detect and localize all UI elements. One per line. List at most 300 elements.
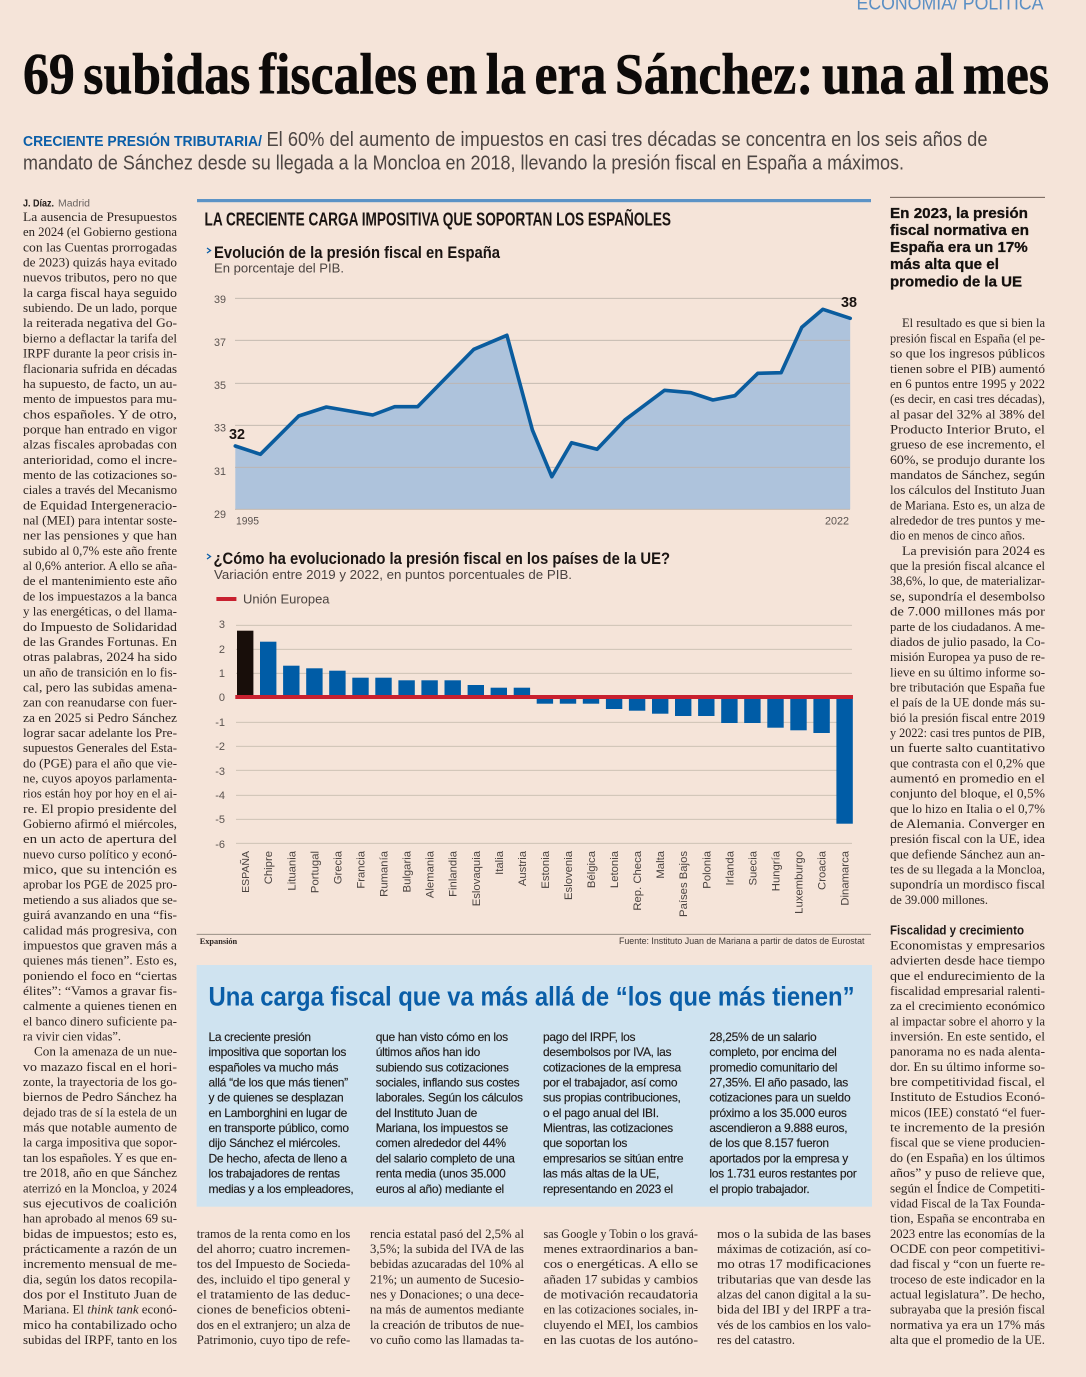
box text column 4: próximo a los 35.000 euros	[709, 1106, 847, 1120]
text block: bottom column 1: tramos de la renta como en los	[197, 1227, 350, 1241]
box text column 1: dijo Sánchez el miércoles.	[208, 1136, 340, 1150]
box text column 3: empresarios se sitúan entre	[543, 1151, 684, 1165]
text block: bottom column 1	[197, 1227, 351, 1347]
country labels: Bélgica	[586, 850, 598, 888]
text block: left column: aprobar los PGE de 2025 pro-	[23, 878, 177, 892]
text block: left column: chos españoles. Y de otro,	[23, 407, 177, 421]
heading: line chart: Evolución de la presión fiscal en España	[214, 244, 501, 262]
axis labels: 35	[214, 380, 226, 392]
text block: bottom column 2: bebidas azucaradas del 10% al	[370, 1257, 524, 1271]
text block: left column: porque han entrado en vigor	[23, 422, 178, 436]
text block: bottom column 2: rencia estatal pasó del 2,5% al	[370, 1227, 524, 1241]
text block: right column lower: panorama no es nada alenta-	[890, 1045, 1045, 1059]
box text column 2: laborales. Según los cálculos	[376, 1091, 523, 1105]
box text column 3: las más altas de la UE,	[543, 1167, 659, 1181]
box text column 4: completo, por encima del	[709, 1045, 837, 1059]
subtitle block: mandato de Sánchez desde su llegada a la Moncloa en 2018, llevando la presión fiscal en España a máximos.	[23, 152, 904, 174]
text block: bottom column 3: menes extraordinarios a ban-	[544, 1242, 698, 1256]
text block: left column: nuevo curso político y econó-	[23, 847, 177, 861]
text block: right column lower: dad fiscal y “con un fuerte re-	[890, 1257, 1045, 1271]
text block: left column: incremento mensual de me-	[23, 1257, 177, 1271]
country labels: Estonia	[540, 850, 552, 889]
axis labels: -4	[215, 790, 225, 802]
text block: right column: parte de los ciudadanos. A me-	[890, 620, 1045, 634]
country labels: Suecia	[747, 850, 759, 886]
chart panel heading: LA CRECIENTE CARGA IMPOSITIVA QUE SOPORTAN LOS ESPAÑOLES	[204, 208, 671, 230]
box text column 4: 28,25% de un salario	[709, 1030, 817, 1044]
text block: right column: Producto Interior Bruto, el	[890, 422, 1046, 436]
text block: left column: re. El propio presidente del	[23, 802, 178, 816]
box text column 4: ascendieron a 9.888 euros,	[709, 1121, 847, 1135]
text block: bottom column 3	[544, 1227, 698, 1347]
box text column 4: promedio comunitario del	[709, 1060, 837, 1074]
box text column 1: impositiva que soportan los	[208, 1045, 346, 1059]
text block: bottom column 1: Patrimonio, cuyo tipo de refe-	[197, 1333, 350, 1347]
bars	[237, 631, 853, 824]
text block: left column: flacionaria sufrida en décadas	[23, 362, 177, 376]
box text column 2: que han visto cómo en los	[376, 1030, 508, 1044]
box text column 4: aportados por la empresa y	[709, 1151, 848, 1165]
text block: left column: Con la amenaza de un nue-	[34, 1045, 177, 1059]
text block: left column: bierno a deflactar la tarifa del	[23, 331, 178, 345]
axis labels: -1	[215, 717, 225, 729]
text block: left column: do Impuesto de Solidaridad	[23, 620, 178, 634]
text block: right column lower: inversión. En este sentido, el	[890, 1030, 1046, 1044]
box text column 3: o el pago anual del IBI.	[543, 1106, 659, 1120]
text block: left column: de las Grandes Fortunas. En	[23, 635, 178, 649]
text block: right column: 60%, se produjo durante los	[890, 453, 1045, 467]
text block: bottom column 2: la creación de tributos de nue-	[370, 1318, 524, 1332]
box text column 2: comen alrededor del 44%	[376, 1136, 506, 1150]
text block: right column: un fuerte salto cuantitativo	[890, 741, 1045, 755]
text block: left column: supuestos Generales del Esta-	[23, 741, 177, 755]
callout: right column highlight: En 2023, la presión	[890, 205, 1028, 222]
text block: left column: Mariana. El think tank econó-	[23, 1303, 177, 1317]
text block: left column: tre 2018, año en que Sánchez	[23, 1166, 177, 1180]
text block: left column: ner las pensiones y que han	[23, 529, 178, 543]
box text column 1: y de quienes se desplazan	[208, 1091, 343, 1105]
text block: bottom column 4: vés de los cambios en los valo-	[717, 1318, 871, 1332]
text block: right column: de Mariana. Esto es, un alza de	[890, 498, 1045, 512]
country labels: Letonia	[609, 850, 621, 888]
text block: left column: la reiterada negativa del Go-	[23, 316, 177, 330]
text block: left column: ha supuesto, de facto, un au-	[23, 377, 177, 391]
box text column 1: españoles va mucho más	[208, 1060, 338, 1074]
text block: left column: aterrizó en la Moncloa, y 2024	[23, 1181, 178, 1195]
text block: left column: con las Cuentas prorrogadas	[23, 240, 177, 254]
text block: right column lower: subrayaba que la presión fiscal	[890, 1303, 1045, 1317]
text block: left column: do (PGE) para el año que vie-	[23, 756, 177, 770]
text block: right column lower: micos (IEE) constató “el fuer-	[890, 1105, 1045, 1119]
text block: right column: (es decir, en casi tres décadas),	[890, 392, 1045, 406]
box text column 4: el propio trabajador.	[709, 1182, 809, 1196]
text block: left column: poniendo el foco en “ciertas	[23, 969, 177, 983]
callout: right column highlight	[890, 205, 1029, 291]
box text column 3: pago del IRPF, los	[543, 1030, 635, 1044]
box text column 1: medias y a los empleadores,	[208, 1182, 353, 1196]
country labels: Grecia	[332, 850, 344, 884]
heading: line chart	[207, 244, 501, 276]
text block: right column: tienen sobre el PIB) aumentó	[890, 362, 1045, 376]
box text column 1: allá “de los que más tienen”	[208, 1076, 348, 1090]
axis labels: 29	[214, 509, 226, 521]
text block: right column lower: Instituto de Estudios Econó-	[890, 1090, 1045, 1104]
callout: right column highlight: más alta que el	[890, 256, 999, 273]
country labels: Países Bajos	[678, 851, 690, 917]
text block: right column: alrededor de tres puntos y me-	[890, 514, 1045, 528]
text block: left column: mento de impuestos para mu-	[23, 392, 177, 406]
text block: right column: que contrasta con el 0,2% que	[890, 756, 1045, 770]
text block: left column: otras palabras, 2024 ha sido	[23, 650, 177, 664]
text block: right column: bió la presión fiscal entre 2019	[890, 711, 1045, 725]
text block: left column: prácticamente a razón de un	[23, 1242, 178, 1256]
text block: left column: za en 2025 si Pedro Sánchez	[23, 711, 177, 725]
box text column 3: cotizaciones de la empresa	[543, 1060, 681, 1074]
text block: right column: so que los ingresos públicos	[890, 347, 1045, 361]
country labels: Hungría	[770, 850, 782, 891]
axis labels: 3	[219, 619, 225, 631]
text block: left column: subiendo. De un lado, porque	[23, 301, 177, 315]
axis labels	[214, 294, 849, 528]
text block: right column: los cálculos del Instituto Juan	[890, 483, 1046, 497]
text block: right column: bre tributación que España fue	[890, 680, 1045, 694]
axis labels: -2	[215, 741, 225, 753]
box text column 1: en transporte público, como	[208, 1121, 349, 1135]
axis labels	[215, 619, 225, 851]
text block: left column: vo mazazo fiscal en el hori-	[23, 1060, 177, 1074]
country labels: Malta	[655, 850, 667, 879]
text block: left column: sus ejecutivos de coalición	[23, 1196, 178, 1210]
text block: right column: presión fiscal con la UE, idea	[890, 832, 1045, 846]
country labels: Dinamarca	[840, 850, 852, 906]
text block: right column lower: normativa ya era un 17% más	[890, 1318, 1045, 1332]
axis labels: 39	[214, 294, 226, 306]
text block: left column: mico ha contabilizado ocho	[23, 1318, 177, 1332]
country labels: Polonia	[701, 850, 713, 889]
axis labels: -6	[215, 839, 225, 851]
box text column 2	[376, 1030, 523, 1196]
text block: left column: más que notable aumento de	[23, 1121, 177, 1135]
text block: left column: nuevos tributos, pero no que	[23, 271, 177, 285]
axis labels: 2	[219, 644, 225, 656]
box text column 2: euros al año) mediante el	[376, 1182, 504, 1196]
text block: left column: Gobierno afirmó el miércoles,	[23, 817, 177, 831]
text block: right column lower: al impactar sobre el ahorro y la	[890, 1014, 1045, 1028]
text block: left column: ciales a través del Mecanismo	[23, 483, 177, 497]
text block: right column: tes de su llegada a la Moncloa,	[890, 863, 1045, 877]
text block: bottom column 3: sas Google y Tobin o los gravá-	[544, 1227, 698, 1241]
text block: bottom column 2: na más de aumentos mediante	[370, 1303, 524, 1317]
text block: left column: de el mantenimiento este año	[23, 574, 177, 588]
box text column 2: del Instituto Juan de	[376, 1106, 478, 1120]
data line	[235, 309, 850, 477]
text block: bottom column 3: cos o energéticas. A ello se	[544, 1257, 698, 1271]
text block: left column: cal, pero las subidas amena-	[23, 680, 177, 694]
text block: right column lower: do (en España) en los últimos	[890, 1151, 1045, 1165]
byline	[23, 198, 90, 210]
text block: left column: zonte, la trayectoria de los go-	[23, 1075, 177, 1089]
text block: right column: 38,6%, lo que, de materializar-	[890, 574, 1045, 588]
text block: right column: conjunto del bloque, el 0,5%	[890, 787, 1046, 801]
text block: left column: la carga impositiva que sopor-	[23, 1136, 177, 1150]
box text column 1: los trabajadores de rentas	[208, 1167, 340, 1181]
text block: bottom column 4: máximas de cotización, así co-	[717, 1242, 871, 1256]
text block: left column: guirá avanzando en una “fis-	[23, 908, 177, 922]
text block: left column: calidad más progresiva, con	[23, 923, 178, 937]
text block: right column: dio en menos de cinco años.	[890, 529, 1025, 543]
axis labels: 0	[219, 692, 225, 704]
country labels: Finlandia	[448, 850, 460, 897]
text block: left column: de Equidad Intergeneracio-	[23, 498, 177, 512]
text block: left column: zan con reanudarse con fuer-	[23, 696, 177, 710]
byline: Madrid	[58, 198, 90, 210]
text block: right column lower: alta que el promedio de la UE.	[890, 1333, 1045, 1347]
country labels: Bulgaria	[402, 850, 414, 892]
text block: left column: IRPF durante la peor crisis in-	[23, 347, 177, 361]
text block: left column: al 0,6% anterior. A ello se aña-	[23, 559, 177, 573]
area under line	[235, 309, 850, 509]
line chart: fiscal pressure in Spain	[214, 294, 857, 528]
subtitle block: CRECIENTE PRESIÓN TRIBUTARIA/	[23, 132, 262, 150]
axis labels: -5	[215, 814, 225, 826]
text block: right column: misión Europea ya puso de re-	[890, 650, 1045, 664]
country labels: ESPAÑA	[239, 851, 252, 893]
axis labels: 31	[214, 466, 226, 478]
text block: bottom column 4: alzas del canon digital a la su-	[717, 1288, 871, 1302]
text block: bottom column 3: cluyendo el MEI, los cambios	[544, 1318, 698, 1332]
text block: right column: El resultado es que si bien la	[902, 316, 1045, 330]
subheading: Fiscalidad y crecimiento: Fiscalidad y crecimiento	[890, 923, 1024, 937]
box text column 4: los 1.731 euros restantes por	[709, 1167, 857, 1181]
text block: bottom column 4: mos o la subida de las bases	[717, 1227, 871, 1241]
text block: bottom column 3: añaden 17 subidas y cambios	[544, 1272, 698, 1286]
text block: left column: subidas del IRPF, tanto en los	[23, 1333, 177, 1347]
text block: right column: aumentó en promedio en el	[890, 772, 1046, 786]
text block: right column lower	[890, 938, 1046, 1347]
text block: bottom column 4: res del catastro.	[717, 1333, 795, 1347]
text block: left column: de los impuestazos a la banca	[23, 589, 177, 603]
text block: right column: que lo hizo en Italia o el 0,7%	[890, 802, 1046, 816]
text block: right column: grueso de ese incremento, el	[890, 438, 1046, 452]
country labels	[239, 850, 852, 917]
text block: bottom column 4: bida del IBI y del IRPF a tra-	[717, 1303, 871, 1317]
text block: left column: subido al 0,7% este año frente	[23, 544, 177, 558]
bar chart: EU countries	[215, 619, 853, 917]
box text column 3	[543, 1030, 684, 1196]
text block: left column: en 2024 (el Gobierno gestiona	[23, 225, 177, 239]
box text column 3: representando en 2023 el	[543, 1182, 673, 1196]
heading: bar chart: Variación entre 2019 y 2022, en puntos porcentuales de PIB.	[214, 568, 572, 582]
text block: bottom column 1: el tratamiento de las deduc-	[197, 1288, 350, 1302]
box text column 3: Mientras, las cotizaciones	[543, 1121, 673, 1135]
text block: right column	[890, 316, 1046, 907]
country labels: Francia	[356, 850, 368, 889]
box text column 2: subiendo sus cotizaciones	[376, 1060, 509, 1074]
text block: left column: ne, cuyos apoyos parlamenta-	[23, 772, 177, 786]
country labels: Alemania	[425, 850, 437, 898]
text block: right column: lieve en su último informe so-	[890, 665, 1045, 679]
axis labels: -3	[215, 766, 225, 778]
text block: right column: diados de julio pasado, la Co-	[890, 635, 1045, 649]
country labels: Austria	[517, 850, 529, 886]
country labels: Lituania	[286, 850, 298, 891]
panel: chart header bar	[197, 199, 871, 202]
axis labels: 2022	[825, 516, 849, 528]
source note: Fuente: Instituto Juan de Mariana a partir de datos de Eurostat	[619, 936, 865, 946]
box text column 1: La creciente presión	[208, 1030, 311, 1044]
text block: right column: al pasar del 32% al 38% del	[890, 407, 1046, 421]
text block: bottom column 2: nes y Donaciones; o una dece-	[370, 1288, 524, 1302]
text block: right column lower: bre competitividad fiscal, el	[890, 1075, 1046, 1089]
text block: left column: el banco dinero suficiente pa-	[23, 1014, 177, 1028]
country labels: Eslovenia	[563, 850, 575, 900]
box text column 1	[208, 1030, 353, 1196]
text block: right column lower: según el Índice de Competiti-	[890, 1181, 1045, 1195]
box text column 2: sociales, inflando sus costes	[376, 1076, 520, 1090]
text block: right column lower: troceso de este indicador en la	[890, 1272, 1045, 1286]
value labels: 32	[229, 426, 245, 443]
country labels: Rumanía	[378, 850, 390, 897]
text block: left column: un año de transición en lo fis-	[23, 665, 177, 679]
box text column 2: últimos años han ido	[376, 1045, 481, 1059]
text block: left column	[23, 210, 178, 1347]
box text column 3: desembolsos por IVA, las	[543, 1045, 672, 1059]
text block: right column lower: Economistas y empresarios	[890, 938, 1045, 952]
text block: left column: han aprobado al menos 69 su-	[23, 1212, 177, 1226]
text block: bottom column 4: mo otras 17 modificaciones	[717, 1257, 871, 1271]
text block: left column: la carga fiscal haya seguido	[23, 286, 177, 300]
country labels: Italia	[494, 850, 506, 875]
text block: left column: mico, que su intención es	[23, 863, 177, 877]
text block: right column: que defiende Sánchez aun an-	[890, 847, 1045, 861]
heading: bar chart	[207, 550, 670, 582]
callout: right column highlight: fiscal normativa en	[890, 222, 1029, 239]
text block: right column: La previsión para 2024 es	[902, 544, 1045, 558]
axis labels: 33	[214, 423, 226, 435]
text block: left column: nal (MEI) para intentar soste-	[23, 514, 177, 528]
text block: bottom column 3: de motivación recaudatoria	[544, 1288, 698, 1302]
text block: right column: presión fiscal en España (el pe-	[890, 331, 1045, 345]
text block: bottom column 2: 21%; un aumento de Sucesio-	[370, 1272, 524, 1286]
text block: left column: tan los españoles. Y es que en-	[23, 1151, 177, 1165]
country labels: Croacia	[817, 850, 829, 890]
country labels: Eslovaquia	[471, 850, 483, 906]
axis labels: 1	[219, 668, 225, 680]
text block: right column: el país de la UE donde más su-	[890, 696, 1045, 710]
country labels: Rep. Checa	[632, 850, 644, 911]
subtitle block: El 60% del aumento de impuestos en casi tres décadas se concentra en los seis años de	[266, 129, 988, 151]
text block: right column lower: que el endurecimiento de la	[890, 969, 1045, 983]
text block: right column lower: actual legislatura”. De hecho,	[890, 1288, 1045, 1302]
text block: right column lower: fiscalidad empresarial ralenti-	[890, 984, 1045, 998]
credit: Expansión: Expansión	[200, 936, 237, 946]
callout: right column highlight: España era un 17%	[890, 239, 1028, 256]
box heading: Una carga fiscal que va más allá de “los que más tienen”	[208, 982, 854, 1012]
box text column 3: por el trabajador, así como	[543, 1076, 678, 1090]
text block: bottom column 2	[370, 1227, 524, 1347]
text block: left column: quienes más tienen”. Esto es,	[23, 954, 177, 968]
box text column 2: del salario completo de una	[376, 1151, 515, 1165]
text block: left column: ra vivir cien vidas”.	[23, 1030, 121, 1044]
EU reference line	[235, 695, 853, 699]
text block: bottom column 1: des, incluido el tipo general y	[197, 1272, 351, 1286]
text block: left column: de 2023) quizás haya evitado	[23, 256, 177, 270]
box text column 2: Mariana, los impuestos se	[376, 1121, 508, 1135]
subtitle block	[23, 129, 988, 174]
text block: bottom column 3: en las cuotas de los autóno-	[544, 1333, 698, 1347]
text block: bottom column 1: dos en el extranjero; un alza de	[197, 1318, 351, 1332]
box text column 2: renta media (unos 35.000	[376, 1167, 506, 1181]
text block: bottom column 2: vo cuño como las llamadas ta-	[370, 1333, 524, 1347]
text block: right column: de Alemania. Converger en	[890, 817, 1046, 831]
legend: Unión Europea	[243, 592, 330, 606]
box text column 1: en Lamborghini en lugar de	[208, 1106, 348, 1120]
text block: bottom column 2: 3,5%; la subida del IVA de las	[370, 1242, 524, 1256]
text block: left column: en un acto de apertura del	[23, 832, 178, 846]
text block: right column lower: fiscal que se viene producien-	[890, 1136, 1045, 1150]
text block: left column: lograr sacar adelante los Pre-	[23, 726, 177, 740]
value labels	[229, 294, 857, 443]
text block: right column lower: OCDE con peor competitivi-	[890, 1242, 1045, 1256]
text block: bottom column 4: tributarias que van desde las	[717, 1272, 871, 1286]
text block: right column lower: te incremento de la presión	[890, 1121, 1046, 1135]
country labels: Irlanda	[724, 850, 736, 886]
text block: right column lower: dor. En su último informe so-	[890, 1060, 1045, 1074]
text block: left column: rios están hoy por hoy en el ai-	[23, 787, 177, 801]
text block: right column lower: za el crecimiento económico	[890, 999, 1045, 1013]
country labels: Luxemburgo	[794, 851, 806, 914]
text block: left column: mento de las cotizaciones so-	[23, 468, 177, 482]
panel: blue sidebar box	[197, 965, 872, 1207]
text block: right column: se, supondría el desembolso	[890, 589, 1045, 603]
text block: right column: que la presión fiscal alcance el	[890, 559, 1045, 573]
box text column 4: cotizaciones para un sueldo	[709, 1091, 851, 1105]
heading: bar chart: ¿Cómo ha evolucionado la presión fiscal en los países de la UE?	[214, 550, 670, 568]
text block: left column: dos por el Instituto Juan de	[23, 1288, 177, 1302]
text block: left column: y las energéticas, o del llama-	[23, 605, 177, 619]
text block: right column: y 2022: casi tres puntos de PIB,	[890, 726, 1045, 740]
country labels: Chipre	[263, 851, 275, 884]
text block: right column lower: advierten desde hace tiempo	[890, 954, 1045, 968]
text block: bottom column 1: del ahorro; cuatro incremen-	[197, 1242, 350, 1256]
box text column 4	[709, 1030, 857, 1196]
text block: bottom column 1: tos del Impuesto de Socieda-	[197, 1257, 350, 1271]
text block: left column: calmente a quienes tienen en	[23, 999, 178, 1013]
text block: right column lower: años” y puso de relieve que,	[890, 1166, 1045, 1180]
text block: right column: en 6 puntos entre 1995 y 2022	[890, 377, 1045, 391]
callout: right column highlight: promedio de la UE	[890, 274, 1022, 291]
text block: left column: impuestos que graven más a	[23, 938, 177, 952]
text block: right column: de 39.000 millones.	[890, 893, 988, 907]
text block: left column: biernos de Pedro Sánchez ha	[23, 1090, 177, 1104]
text block: left column: anterioridad, como el incre-	[23, 453, 177, 467]
axis labels: 37	[214, 337, 226, 349]
heading: line chart: En porcentaje del PIB.	[214, 262, 344, 276]
text block: left column: alzas fiscales aprobadas con	[23, 438, 178, 452]
text block: left column: bidas de impuestos; esto es,	[23, 1227, 177, 1241]
value labels: 38	[841, 294, 857, 311]
country labels: Portugal	[309, 851, 321, 893]
box text column 4: de los que 8.157 fueron	[709, 1136, 829, 1150]
text block: left column: La ausencia de Presupuestos	[23, 210, 177, 224]
text block: bottom column 4	[717, 1227, 871, 1347]
text block: right column lower: tion, España se encontraba en	[890, 1212, 1046, 1226]
box text column 1: De hecho, afecta de lleno a	[208, 1151, 347, 1165]
text block: right column: supondría un mordisco fiscal	[890, 878, 1046, 892]
text block: right column lower: 2023 entre las economías de la	[890, 1227, 1045, 1241]
text block: right column lower: vidad Fiscal de la Tax Founda-	[890, 1196, 1045, 1210]
text block: right column: mandatos de Sánchez, según	[890, 468, 1046, 482]
